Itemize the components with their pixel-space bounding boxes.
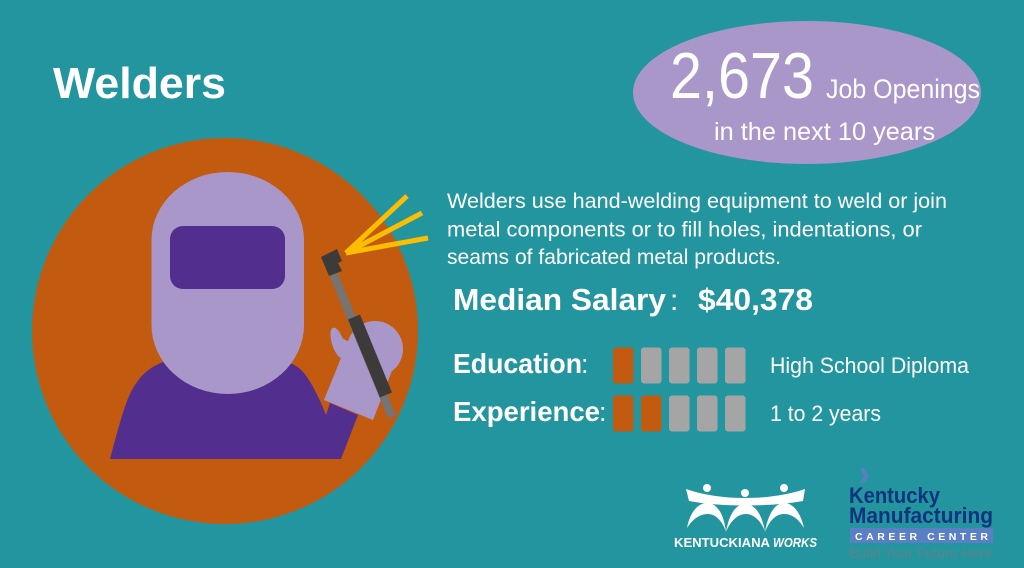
job description: metal components or to fill holes, indentations, or xyxy=(447,218,922,242)
body xyxy=(110,362,358,459)
illustration: welder xyxy=(32,138,428,524)
logo: Kentucky Manufacturing Career Center: Kentucky xyxy=(849,483,941,508)
logo: Kentucky Manufacturing Career Center: Manufacturing xyxy=(849,503,993,528)
median salary: Median Salary xyxy=(453,282,667,317)
logo: KentuckianaWorks: WORKS xyxy=(773,535,817,550)
torch shaft xyxy=(333,273,392,417)
callout: job openings: Job Openings xyxy=(826,74,980,104)
sparks xyxy=(346,196,428,253)
education rating: : xyxy=(581,349,589,379)
callout: job openings xyxy=(633,21,981,164)
experience rating: : xyxy=(599,397,607,427)
job description xyxy=(447,190,947,269)
callout: job openings: in the next 10 years xyxy=(714,118,935,146)
logo: Kentucky Manufacturing Career Center: Build Your Future Here xyxy=(849,545,992,562)
median salary xyxy=(453,282,813,317)
title: Welders xyxy=(53,59,226,108)
logo: Kentucky Manufacturing Career Center xyxy=(849,468,993,562)
background circle xyxy=(32,138,418,524)
glove xyxy=(324,321,403,420)
experience rating: 1 to 2 years xyxy=(770,401,881,426)
callout: job openings: 2,673 xyxy=(670,39,814,112)
education rating: High School Diploma xyxy=(770,353,970,378)
experience rating xyxy=(453,396,881,432)
job description: Welders use hand-welding equipment to weld or join xyxy=(447,190,947,213)
experience rating: Experience xyxy=(453,396,600,427)
visor xyxy=(170,226,285,289)
median salary: : xyxy=(670,284,678,317)
torch head xyxy=(321,249,342,276)
job description: seams of fabricated metal products. xyxy=(447,246,781,269)
logo: KentuckianaWorks: KENTUCKIANA xyxy=(674,535,771,550)
helmet xyxy=(152,172,304,394)
logo: Kentucky Manufacturing Career Center: CAREER CENTER xyxy=(855,531,988,543)
education rating xyxy=(453,348,970,384)
median salary: $40,378 xyxy=(698,282,813,317)
logo: KentuckianaWorks xyxy=(674,484,817,550)
education rating: Education xyxy=(453,348,582,379)
torch handle xyxy=(354,317,386,395)
